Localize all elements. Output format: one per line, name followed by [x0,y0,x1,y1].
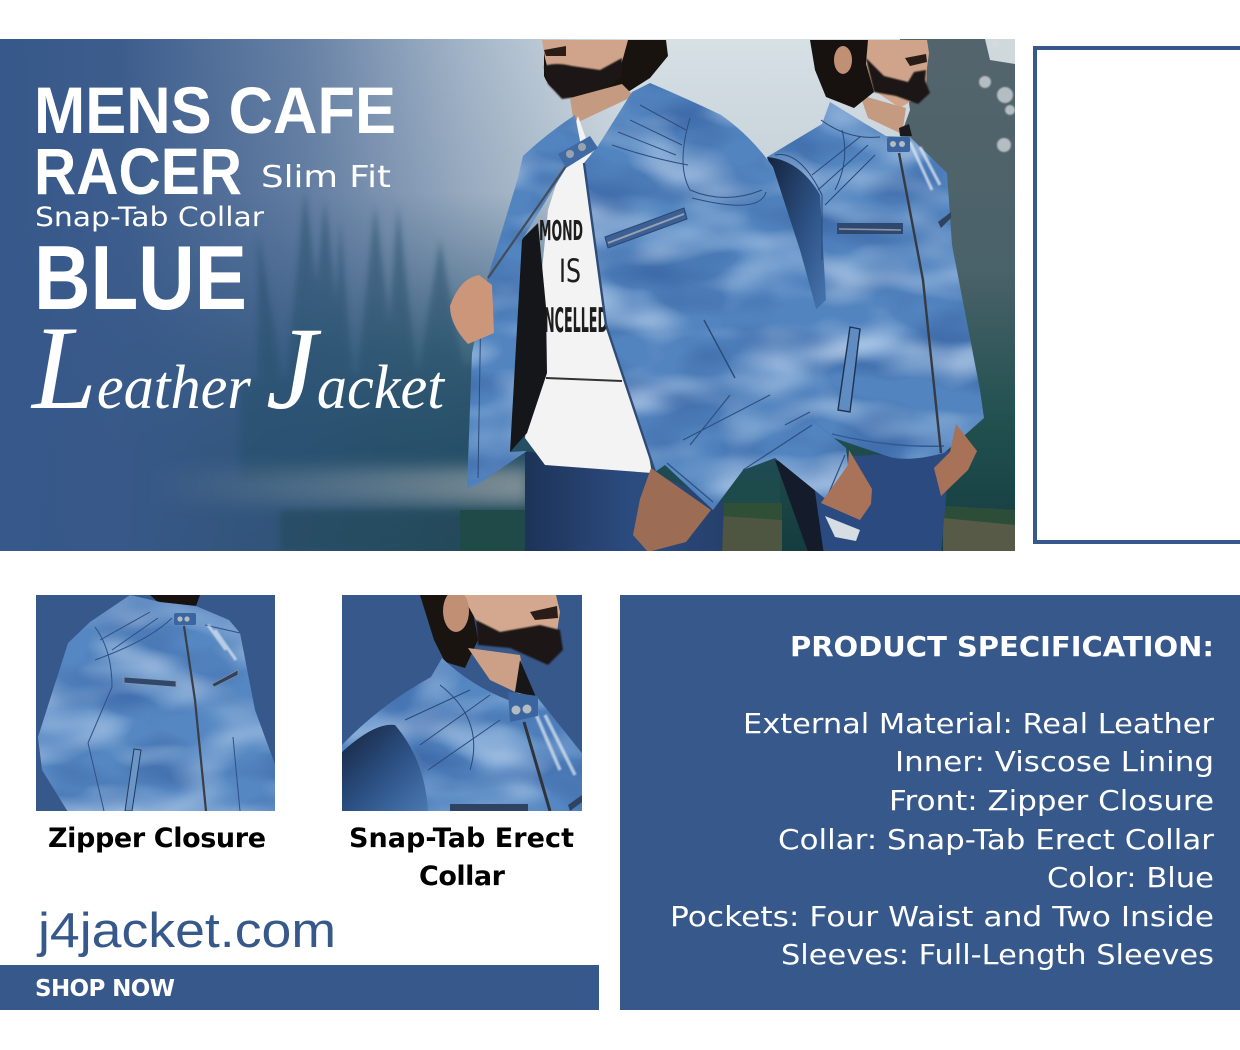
panel: product specification [620,595,1240,1010]
shop now bar: SHOP NOW [35,976,175,1002]
specification list: Inner: Viscose Lining [895,745,1214,778]
title: mens cafe: MENS CAFE [34,73,396,147]
caption: zipper closure: Zipper Closure [48,823,266,854]
specification list: Color: Blue [1047,861,1214,894]
shop now bar [0,965,599,1010]
model: left man with open jacket: MOND [539,214,583,247]
website url: j4jacket.com [36,904,336,958]
model: right man seen from the front [767,40,984,555]
specification list: Pockets: Four Waist and Two Inside [670,900,1214,933]
caption: snap-tab erect collar: Snap-Tab Erect [349,823,574,854]
specification list: Collar: Snap-Tab Erect Collar [778,823,1215,856]
title: racer: RACER [34,134,242,208]
subtitle: snap-tab collar: Snap-Tab Collar [35,202,265,233]
thumbnail: zipper closure [36,595,277,812]
caption: snap-tab erect collar: Collar [419,861,506,892]
specification list [670,707,1215,971]
caption: snap-tab erect collar [349,823,574,892]
model: left man with open jacket: NCELLED [544,301,608,341]
white frame panel [1035,48,1240,542]
script title: leather jacket: Leather Jacket [30,301,446,434]
title: blue: BLUE [34,228,247,329]
thumbnail: snap-tab collar [342,590,585,812]
hero banner [0,39,1015,555]
subtitle: slim fit: Slim Fit [261,160,391,195]
specification list: External Material: Real Leather [743,707,1215,740]
specification heading: PRODUCT SPECIFICATION: [790,630,1214,663]
specification list: Sleeves: Full-Length Sleeves [781,938,1214,971]
model: left man with open jacket [450,40,872,555]
specification list: Front: Zipper Closure [889,784,1214,817]
model: left man with open jacket: IS [559,252,581,290]
